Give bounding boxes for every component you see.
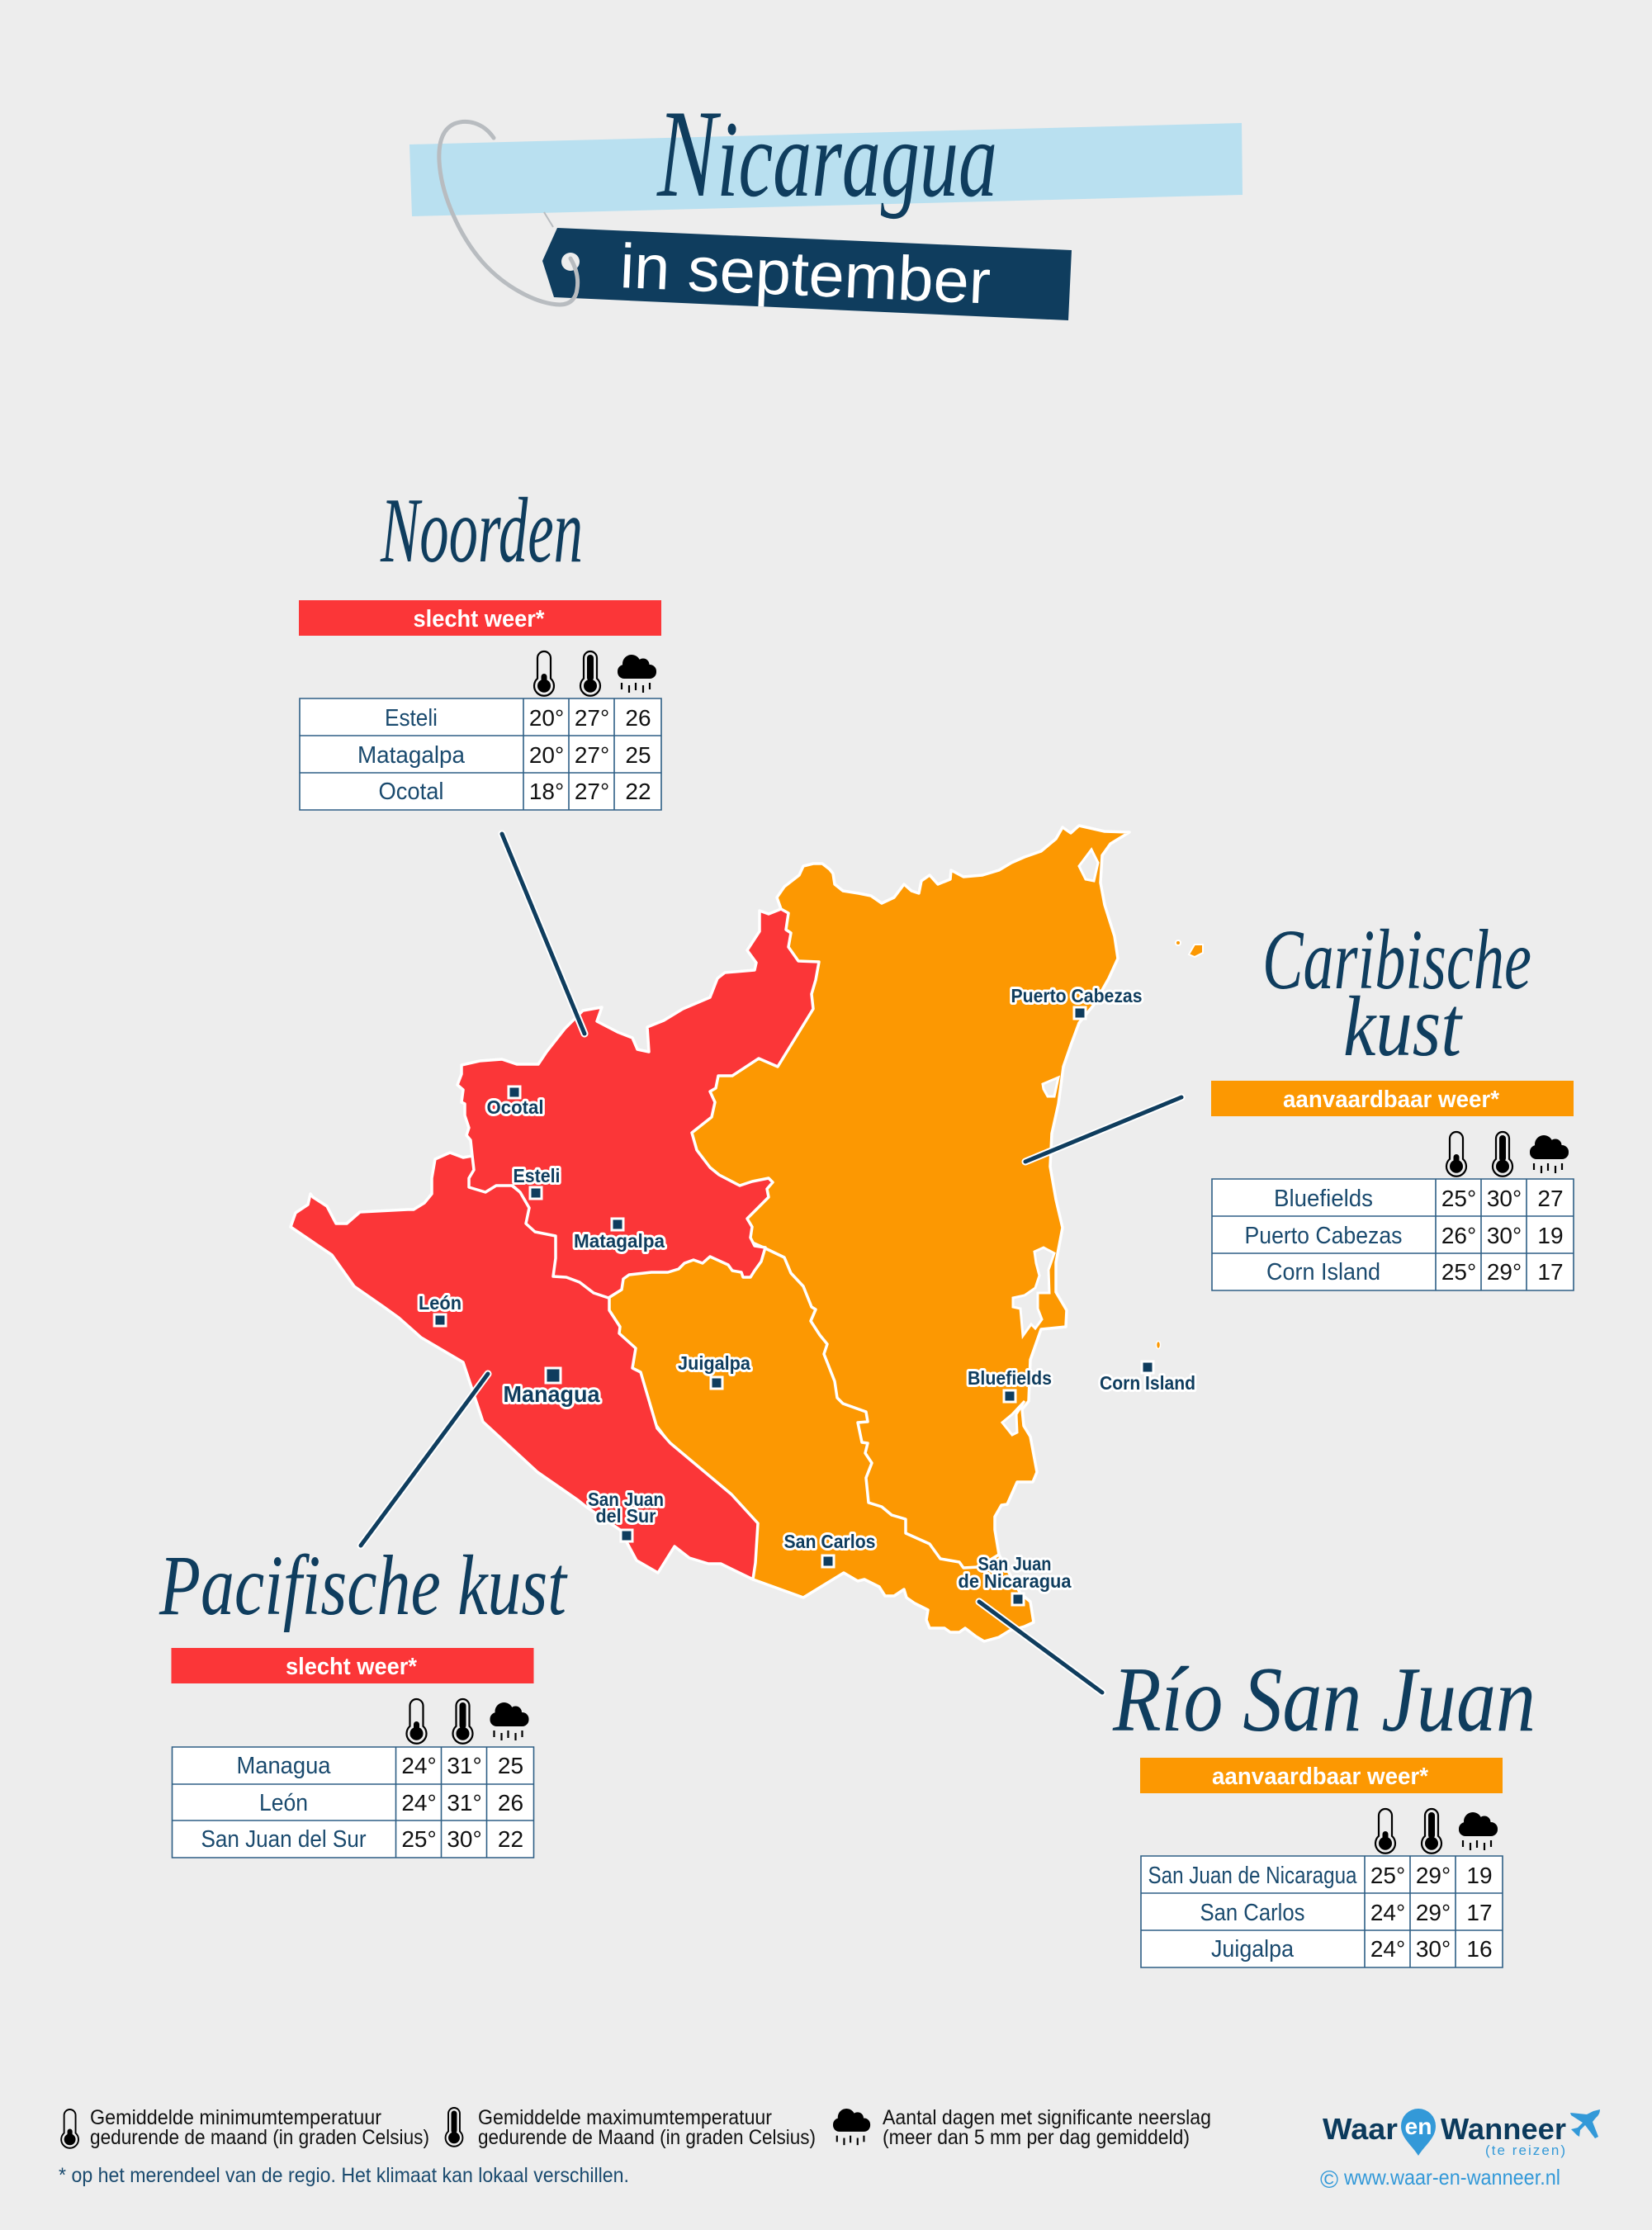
climate table: 25° [1441, 1259, 1476, 1285]
climate table: 20° [529, 705, 564, 731]
city: San Juan del Sur: San Juan [588, 1489, 664, 1510]
climate table: 26 [625, 705, 651, 731]
logo word: en: en [1405, 2114, 1432, 2139]
climate table: 24° [1370, 1900, 1405, 1925]
logo pin [1401, 2109, 1436, 2156]
logo word: Wanneer: Wanneer [1441, 2112, 1566, 2146]
status banner: aanvaardbaar weer* [1283, 1087, 1500, 1113]
legend [61, 2106, 1211, 2149]
climate table: 25 [498, 1753, 523, 1778]
climate table: 19 [1537, 1223, 1564, 1248]
city: Matagalpa [574, 1219, 665, 1252]
icon: maximum temperature [1493, 1132, 1512, 1177]
panel: Pacifische kust [172, 1648, 533, 1858]
logo: Waar en Wanneer [1323, 2109, 1600, 2158]
icon: minimum temperature [534, 651, 554, 696]
climate table: 22 [498, 1826, 523, 1852]
climate table: San Juan de Nicaragua [1148, 1863, 1357, 1889]
city: Juigalpa: Juigalpa [678, 1352, 750, 1374]
climate table: 25 [625, 742, 651, 768]
callout line: Pacifische kust [361, 1374, 488, 1546]
price tag: dark blue [542, 228, 1072, 320]
climate table: 18° [529, 779, 564, 804]
copyright and website: © [1320, 2166, 1338, 2194]
status banner [299, 600, 661, 636]
icon: rain [490, 1702, 528, 1740]
heading: Noorden: Noorden [380, 480, 583, 582]
city: San Carlos [784, 1531, 875, 1567]
climate table: 25° [401, 1826, 437, 1852]
climate table: 31° [447, 1753, 482, 1778]
city: Puerto Cabezas: Puerto Cabezas [1011, 985, 1143, 1006]
climate table: 29° [1487, 1259, 1522, 1285]
city: Managua: Managua [504, 1381, 600, 1407]
legend text: rain: Aantal dagen met significante neerslag [883, 2106, 1211, 2129]
city: San Juan del Sur: del Sur [596, 1505, 656, 1527]
city: Esteli [514, 1165, 560, 1199]
climate table: 30° [1487, 1186, 1522, 1211]
city: Ocotal: Ocotal [487, 1096, 543, 1118]
city: León: León [419, 1292, 462, 1314]
icon: rain [618, 655, 656, 693]
climate table: 30° [447, 1826, 482, 1852]
lagoon: Bluefields [1002, 1401, 1025, 1435]
climate table: 16 [1466, 1936, 1493, 1962]
region: Caribische kust [660, 826, 1129, 1585]
climate table: Managua [236, 1753, 331, 1779]
climate table: San Juan del Sur [201, 1826, 367, 1853]
city: San Juan de Nicaragua: San Juan [977, 1553, 1052, 1574]
city: San Juan de Nicaragua: de Nicaragua [958, 1570, 1072, 1592]
status banner [1211, 1081, 1574, 1116]
status banner: slecht weer* [286, 1654, 418, 1680]
lagoon: Pearl Lagoon [1013, 1248, 1054, 1336]
islands: Miskito cays [1176, 940, 1203, 957]
callout line: Noorden [502, 834, 585, 1034]
climate table: 29° [1416, 1900, 1451, 1925]
icon: rain [1459, 1812, 1498, 1850]
logo word: Waar: Waar [1323, 2112, 1398, 2146]
legend text: minimum temperature [90, 2106, 429, 2149]
city: Corn Island: Corn Island [1100, 1372, 1195, 1394]
icon: rain [1530, 1135, 1569, 1173]
title block [409, 84, 1243, 320]
city: Bluefields [968, 1367, 1052, 1402]
logo tagline: (te reizen) [1485, 2142, 1565, 2158]
climate table: 22 [625, 779, 651, 804]
climate table: 24° [401, 1753, 437, 1778]
city: Juigalpa [678, 1352, 750, 1389]
callout line: Caribische kust [1025, 1097, 1181, 1162]
heading: Pacifische kust: Pacifische kust [159, 1538, 568, 1633]
climate table: Puerto Cabezas [1245, 1223, 1402, 1249]
heading: Caribische kust: kust [1343, 979, 1463, 1074]
tag string [439, 121, 578, 305]
climate table: 27° [575, 779, 609, 804]
climate table: Matagalpa [357, 742, 466, 769]
icon: minimum temperature [1375, 1809, 1395, 1854]
region: Pacifische kust [291, 1153, 758, 1579]
city: Ocotal [487, 1087, 543, 1118]
legend text: minimum temperature: gedurende de maand (in graden Celsius) [90, 2126, 429, 2149]
island: Corn Island [1156, 1341, 1161, 1349]
climate table: 31° [447, 1790, 482, 1816]
lagoon: Prinzapolka [1043, 1077, 1058, 1096]
climate table: 30° [1487, 1223, 1522, 1248]
tag hole [561, 253, 580, 271]
heading: Río San Juan: Río San Juan [1112, 1649, 1536, 1751]
climate table: 26° [1441, 1223, 1476, 1248]
legend icon: rain [833, 2109, 870, 2145]
climate table: 17 [1466, 1900, 1493, 1925]
city: Managua [504, 1368, 600, 1407]
climate table: 25° [1441, 1186, 1476, 1211]
legend text: rain [883, 2106, 1211, 2149]
climate table: 24° [1370, 1936, 1405, 1962]
climate table: 27° [575, 742, 609, 768]
icon: maximum temperature [580, 651, 600, 696]
panel: Noorden [299, 600, 661, 810]
title banner: light blue [409, 123, 1243, 216]
icon: maximum temperature [452, 1699, 472, 1744]
climate table: 27 [1537, 1186, 1564, 1211]
lagoon: Wounta [1079, 850, 1098, 881]
panel: Río San Juan [1140, 1758, 1503, 1967]
heading: Caribische kust: Caribische [1262, 912, 1531, 1007]
legend text: minimum temperature: Gemiddelde minimumtemperatuur [90, 2106, 381, 2129]
climate table: 24° [401, 1790, 437, 1816]
region: Río San Juan [578, 1238, 1034, 1641]
climate table: León [259, 1790, 308, 1816]
status banner [1140, 1758, 1503, 1793]
icon: maximum temperature [1422, 1809, 1441, 1854]
climate table: Corn Island [1266, 1259, 1380, 1285]
legend text: rain: (meer dan 5 mm per dag gemiddeld) [883, 2126, 1190, 2149]
city: Puerto Cabezas [1011, 985, 1143, 1019]
climate table: Ocotal [378, 779, 444, 805]
legend icon: minimum temperature [61, 2109, 78, 2148]
region: Noorden [457, 909, 819, 1298]
city: Corn Island [1100, 1361, 1195, 1394]
status banner: slecht weer* [413, 606, 545, 632]
city: Matagalpa: Matagalpa [574, 1230, 665, 1252]
city: San Carlos: San Carlos [784, 1531, 875, 1552]
callout line: Río San Juan [979, 1602, 1102, 1693]
climate table: 19 [1466, 1863, 1493, 1888]
climate table [172, 1747, 533, 1858]
status banner: aanvaardbaar weer* [1212, 1764, 1429, 1790]
panel: Caribische kust [1211, 1081, 1574, 1290]
city: Bluefields: Bluefields [968, 1367, 1052, 1389]
city: Esteli: Esteli [514, 1165, 560, 1186]
climate table: 25° [1370, 1863, 1405, 1888]
climate table: San Carlos [1200, 1900, 1304, 1926]
status banner [172, 1648, 533, 1683]
icon: minimum temperature [1446, 1132, 1466, 1177]
climate table: Bluefields [1274, 1186, 1373, 1212]
climate table: 30° [1416, 1936, 1451, 1962]
city: San Juan del Sur [588, 1489, 664, 1541]
thin string [544, 212, 553, 227]
legend text: maximum temperature [478, 2106, 816, 2149]
heading: Nicaragua: Nicaragua [656, 84, 997, 223]
climate table: Esteli [385, 705, 438, 731]
climate table: 26 [498, 1790, 523, 1816]
climate table [1212, 1179, 1574, 1290]
heading: Caribische kust [1262, 912, 1531, 1074]
legend text: maximum temperature: gedurende de Maand (in graden Celsius) [478, 2126, 816, 2149]
legend text: maximum temperature: Gemiddelde maximumtemperatuur [478, 2106, 772, 2129]
climate table: 20° [529, 742, 564, 768]
icon: minimum temperature [406, 1699, 426, 1744]
legend icon: maximum temperature [446, 2108, 462, 2147]
climate table: Juigalpa [1211, 1936, 1295, 1962]
climate table: 29° [1416, 1863, 1451, 1888]
city: León [419, 1292, 462, 1326]
climate table: 27° [575, 705, 609, 731]
icon: plane [1570, 2109, 1600, 2138]
map of Nicaragua [291, 826, 1203, 1641]
city: San Juan de Nicaragua [958, 1553, 1072, 1605]
climate table [300, 698, 661, 810]
footnote: * op het merendeel van de regio. Het klimaat kan lokaal verschillen. [59, 2164, 629, 2187]
subheading: in september: in september [618, 231, 992, 318]
copyright and website: www.waar-en-wanneer.nl [1343, 2165, 1560, 2190]
climate table [1141, 1856, 1503, 1967]
climate table: 17 [1537, 1259, 1564, 1285]
